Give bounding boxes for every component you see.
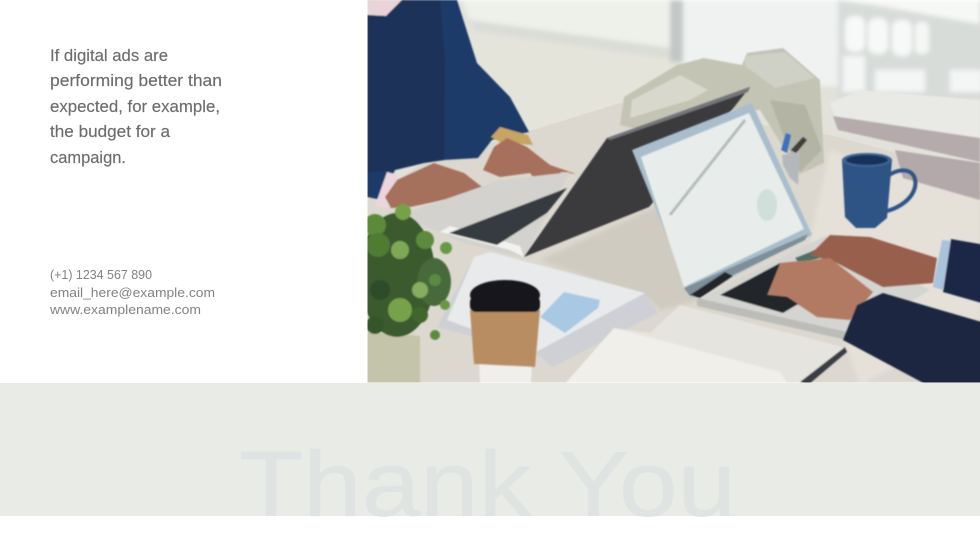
desk surface [367,103,980,385]
bottom band [0,383,980,516]
text block: body message: If digital ads are [50,47,168,65]
text block: contact details: (+1) 1234 567 890 [50,267,152,282]
text block: body message: expected, for example, [50,98,220,116]
coffee cup [470,280,540,385]
photo background: office wall and windows [360,0,980,200]
fax machine [620,48,824,174]
photo: office desk with two people on laptops [359,0,980,385]
title: Thank You: Thank You [239,433,736,535]
documents on desk [437,252,658,367]
person left: navy sweater [367,0,576,210]
text block: contact details [49,267,215,317]
pen cup [781,133,807,185]
paper trays [830,90,980,200]
text block: body message: the budget for a [50,123,171,141]
text block: contact details: email_here@example.com [50,285,215,300]
person right: hands and suit sleeves [767,235,980,385]
laptop left: lid back [524,87,750,257]
watch [491,127,533,145]
text block: body message: performing better than [50,72,222,90]
text block: body message [50,47,222,167]
notebook [564,305,847,385]
right hand [482,138,576,178]
text block: body message: campaign. [50,149,126,167]
left hand [384,162,482,209]
text block: contact details: www.examplename.com [49,302,201,317]
blue mug [842,153,915,228]
laptop right [632,103,930,340]
laptop left: base and keyboard [400,172,570,257]
potted plant [359,204,452,385]
